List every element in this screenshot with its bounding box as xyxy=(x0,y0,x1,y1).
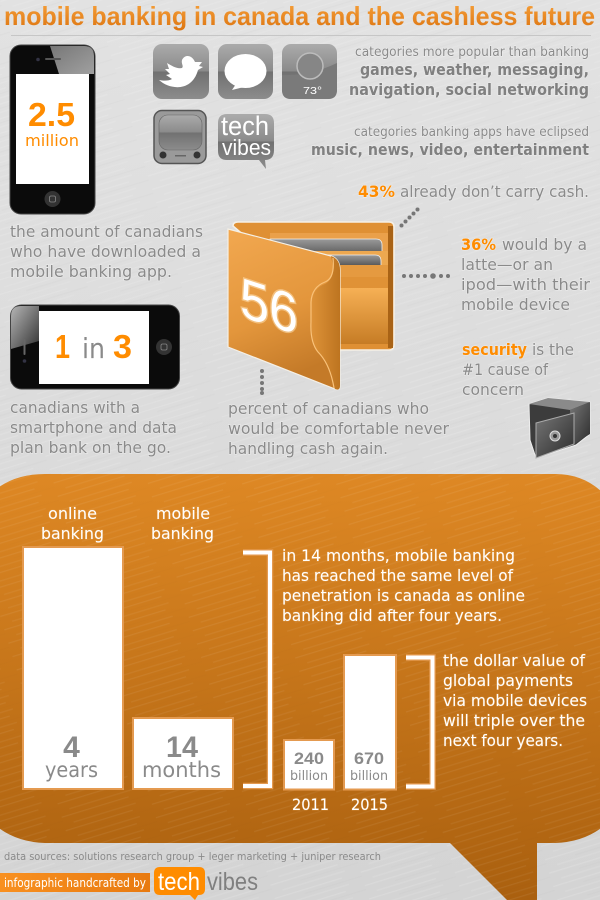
icon: weather app: 73° xyxy=(303,86,322,97)
text block: 56 percent xyxy=(228,399,449,458)
callout: 36 percent: 36% xyxy=(461,235,496,254)
label: mobile banking: mobile xyxy=(156,504,210,523)
callout: 36 percent: would by a xyxy=(502,235,587,254)
text block: 56 percent: handling cash again. xyxy=(228,439,388,458)
text block: smartphone banking: canadians with a xyxy=(10,398,140,417)
bar: 240 billion 2011: billion xyxy=(290,769,328,784)
callout: 36 percent: mobile device xyxy=(461,295,570,314)
text block: smartphone banking xyxy=(10,398,177,457)
label: online banking: banking xyxy=(41,524,104,543)
text block: 56 percent: percent of canadians who xyxy=(228,399,429,418)
bar: online banking 4 years: 4 xyxy=(63,731,80,764)
text block: 14 months: banking did after four years. xyxy=(282,606,502,625)
icon: open safe xyxy=(529,398,590,458)
icon: landscape phone with 1 in 3 xyxy=(10,305,180,389)
text block: 14 months: in 14 months, mobile banking xyxy=(282,546,515,565)
text block: 14 months: penetration is canada as online xyxy=(282,586,525,605)
text block: global payments xyxy=(443,651,587,750)
bar: 240 billion 2011: 240 xyxy=(294,749,324,768)
bar: mobile banking 14 months: months xyxy=(142,758,221,782)
callout: 43 percent: already don’t carry cash. xyxy=(400,182,589,201)
icon: twitter app xyxy=(153,44,209,99)
text block: global payments: via mobile devices xyxy=(443,691,587,710)
bar: 670 billion 2015 xyxy=(344,655,396,814)
bracket: global payments xyxy=(406,658,432,786)
footer logo: techvibes xyxy=(154,867,258,900)
bar: mobile banking 14 months: 14 xyxy=(166,731,198,764)
callout: security xyxy=(462,340,574,399)
callout: security: security xyxy=(462,340,528,359)
footer credit badge xyxy=(0,873,150,892)
icon: landscape phone with 1 in 3: 3 xyxy=(113,328,132,365)
icon: portrait phone with 2.5 million xyxy=(10,45,95,214)
bar: online banking 4 years: years xyxy=(45,758,98,782)
text block: 14 months: has reached the same level of xyxy=(282,566,513,585)
label: mobile banking xyxy=(151,504,214,543)
callout: 36 percent xyxy=(461,235,590,314)
text block: canadians downloaded: the amount of canadians xyxy=(10,222,203,241)
bar: online banking 4 years xyxy=(23,547,123,789)
text block: global payments: will triple over the xyxy=(443,711,585,730)
icon: wallet with 56 xyxy=(228,222,394,390)
text block: categories more popular xyxy=(349,44,589,99)
icon: messaging app xyxy=(218,44,273,99)
dotted connector: 43 percent xyxy=(400,208,420,228)
text block: global payments: global payments xyxy=(443,671,573,690)
label: mobile banking: banking xyxy=(151,524,214,543)
data sources: data sources: solutions research group + leger marketing + juniper research xyxy=(4,850,381,863)
text block: smartphone banking: plan bank on the go. xyxy=(10,438,171,457)
bracket: online vs mobile xyxy=(243,552,270,786)
text block: canadians downloaded: mobile banking app. xyxy=(10,262,172,281)
callout: security: concern xyxy=(462,380,524,399)
dotted connector: wallet right xyxy=(402,273,450,279)
panel: bottom speech bubble xyxy=(0,474,600,900)
text block: smartphone banking: smartphone and data xyxy=(10,418,177,437)
bar: mobile banking 14 months xyxy=(133,718,233,789)
icon: weather app xyxy=(282,44,337,99)
icon: portrait phone with 2.5 million: million xyxy=(25,131,79,150)
icon: techvibes app: vibes xyxy=(222,135,271,160)
text block: 14 months xyxy=(282,546,525,625)
callout: 36 percent: ipod—with their xyxy=(461,275,590,294)
footer credit badge: infographic handcrafted by xyxy=(4,876,146,890)
icon: wallet with 56: 56 xyxy=(240,266,298,348)
bar: 240 billion 2011 xyxy=(284,740,334,814)
bar: 670 billion 2015: billion xyxy=(350,769,388,784)
text block: canadians downloaded xyxy=(10,222,203,281)
text block: global payments: next four years. xyxy=(443,731,563,750)
text block: categories eclipsed xyxy=(311,124,589,159)
icon: techvibes app: tech xyxy=(221,111,269,141)
label: online banking: online xyxy=(48,504,97,523)
bar: 240 billion 2011: 2011 xyxy=(292,795,329,814)
text block: canadians downloaded: who have downloaded a xyxy=(10,242,201,261)
icon: landscape phone with 1 in 3: 1 xyxy=(55,328,70,365)
callout: security: #1 cause of xyxy=(462,360,548,379)
text block: global payments: the dollar value of xyxy=(443,651,585,670)
icon: portrait phone with 2.5 million: 2.5 xyxy=(28,96,75,133)
callout: 36 percent: latte—or an xyxy=(461,255,553,274)
callout: security: is the xyxy=(532,340,574,359)
icon: video app xyxy=(154,110,206,164)
footer logo: techvibes: tech xyxy=(158,868,200,896)
icon: landscape phone with 1 in 3: in xyxy=(82,332,105,365)
label: online banking xyxy=(41,504,104,543)
icon: techvibes app xyxy=(218,111,274,169)
bar: 670 billion 2015: 2015 xyxy=(351,795,388,814)
text block: 56 percent: would be comfortable never xyxy=(228,419,449,438)
dotted connector: wallet bottom xyxy=(260,369,264,395)
bar: 670 billion 2015: 670 xyxy=(354,749,384,768)
footer logo: techvibes: vibes xyxy=(207,868,258,896)
callout: 43 percent: 43% xyxy=(358,182,395,201)
